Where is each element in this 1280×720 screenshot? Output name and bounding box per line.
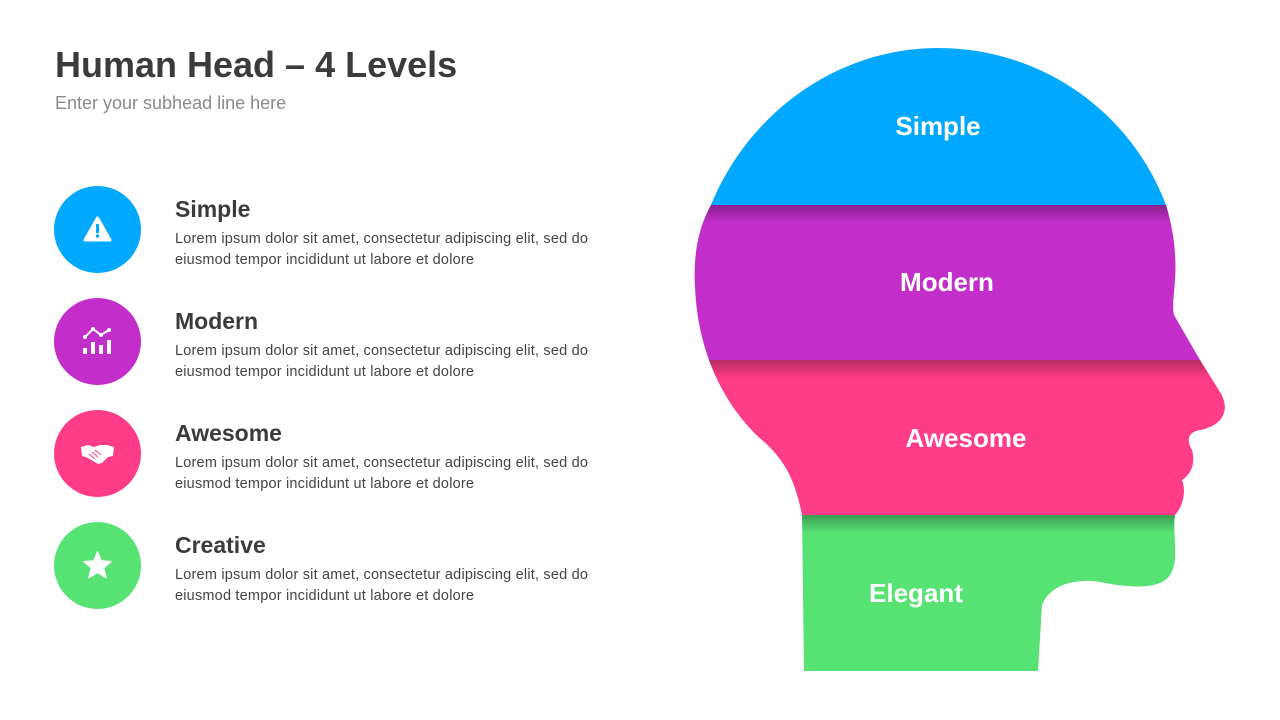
icon: chart (54, 298, 141, 385)
band: modern: Modern (900, 267, 994, 297)
text: Lorem ipsum dolor sit amet, consectetur adipiscing elit, sed do eiusmod tempor incididunt ut labore et dolore (175, 455, 588, 492)
band: modern (680, 205, 1240, 361)
heading: Creative (175, 532, 266, 558)
icon: handshake (54, 410, 141, 497)
item: simple (54, 186, 588, 273)
item: awesome (54, 410, 588, 497)
heading: Simple (175, 196, 250, 222)
heading: Awesome (175, 420, 282, 446)
head diagram (694, 48, 1225, 671)
text: Lorem ipsum dolor sit amet, consectetur adipiscing elit, sed do eiusmod tempor incididunt ut labore et dolore (175, 343, 588, 380)
band: simple (710, 48, 1166, 206)
band: awesome (680, 360, 1240, 516)
band: simple: Simple (895, 111, 981, 141)
icon: star (54, 522, 141, 609)
band: elegant (802, 515, 1176, 671)
item: creative (54, 522, 588, 609)
band: awesome: Awesome (906, 423, 1026, 453)
band: elegant: Elegant (869, 578, 963, 608)
icon: warning (54, 186, 141, 273)
title: Human Head – 4 Levels (55, 44, 457, 85)
subhead: Enter your subhead line here (55, 93, 286, 113)
heading: Modern (175, 308, 258, 334)
item: modern (54, 298, 588, 385)
text: Lorem ipsum dolor sit amet, consectetur adipiscing elit, sed do eiusmod tempor incididunt ut labore et dolore (175, 567, 588, 604)
text: Lorem ipsum dolor sit amet, consectetur adipiscing elit, sed do eiusmod tempor incididunt ut labore et dolore (175, 231, 588, 268)
